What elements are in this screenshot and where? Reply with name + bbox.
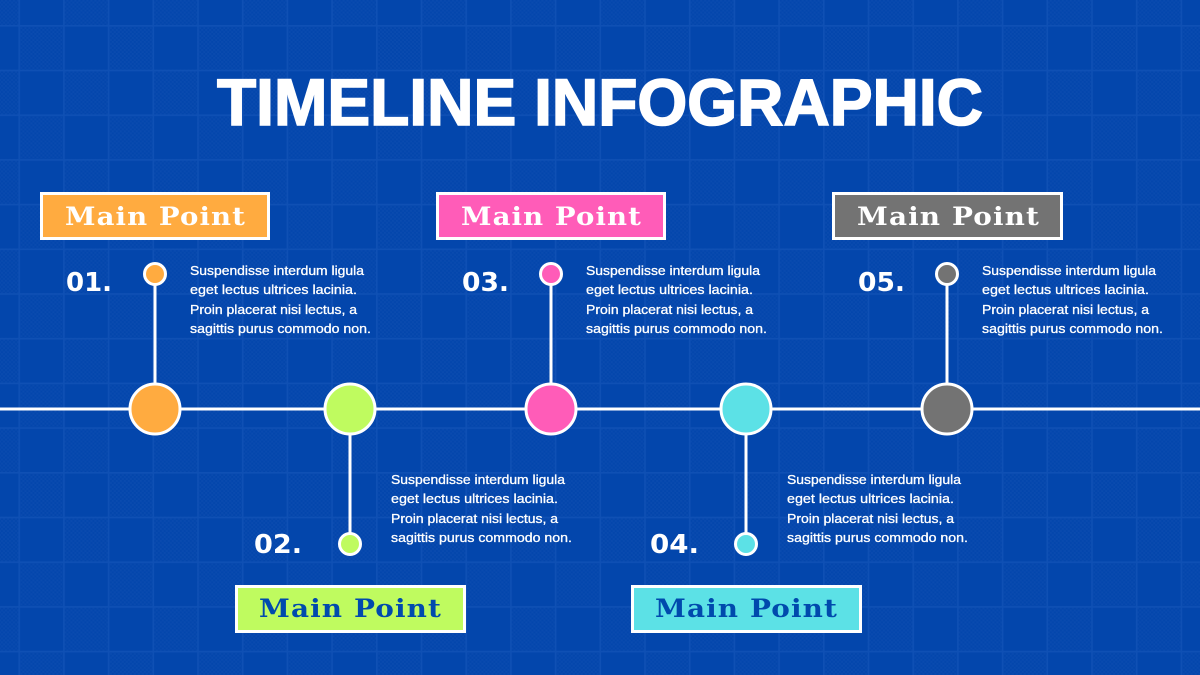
description 03: Proin placerat nisi lectus, a [586, 302, 754, 317]
milestone 02 [236, 384, 572, 632]
number 01: 01. [66, 268, 112, 298]
milestone 01 [42, 194, 371, 434]
milestone 03 [438, 194, 767, 434]
description 05: eget lectus ultrices lacinia. [982, 282, 1149, 297]
description 01: Suspendisse interdum ligula [190, 263, 365, 278]
description 01: Proin placerat nisi lectus, a [190, 302, 358, 317]
description 02: eget lectus ultrices lacinia. [391, 491, 558, 506]
description 04: Suspendisse interdum ligula [787, 472, 962, 487]
description 05: Suspendisse interdum ligula [982, 263, 1157, 278]
description 05: sagittis purus commodo non. [982, 321, 1163, 336]
main point label 03: Main Point [461, 202, 642, 231]
main point label 02: Main Point [259, 594, 442, 623]
main point label 04: Main Point [655, 594, 838, 623]
description 02: sagittis purus commodo non. [391, 530, 572, 545]
description 05 [982, 263, 1163, 336]
description 03: Suspendisse interdum ligula [586, 263, 761, 278]
connector 02 [325, 384, 375, 554]
number 02: 02. [254, 530, 302, 560]
main point label 05: Main Point [857, 202, 1040, 231]
number 05: 05. [858, 268, 905, 298]
description 04: sagittis purus commodo non. [787, 530, 968, 545]
milestone 05 [834, 194, 1163, 434]
description 04: eget lectus ultrices lacinia. [787, 491, 954, 506]
main point label 05 [834, 194, 1062, 238]
timeline axis [0, 408, 1200, 410]
description 04: Proin placerat nisi lectus, a [787, 511, 955, 526]
connector 04 [721, 384, 771, 554]
number 04: 04. [650, 530, 699, 560]
title: TIMELINE INFOGRAPHIC [217, 65, 983, 139]
milestone 04 [632, 384, 968, 632]
main point label 02 [236, 586, 464, 632]
description 05: Proin placerat nisi lectus, a [982, 302, 1150, 317]
description 03: sagittis purus commodo non. [586, 321, 767, 336]
connector 03 [526, 264, 576, 434]
description 02: Suspendisse interdum ligula [391, 472, 566, 487]
description 03 [586, 263, 767, 336]
main point label 01: Main Point [65, 202, 246, 231]
description 01: sagittis purus commodo non. [190, 321, 371, 336]
description 02 [391, 472, 572, 545]
description 01 [190, 263, 371, 336]
main point label 04 [632, 586, 860, 632]
connector 05 [922, 264, 972, 434]
description 01: eget lectus ultrices lacinia. [190, 282, 357, 297]
connector 01 [130, 264, 180, 434]
description 02: Proin placerat nisi lectus, a [391, 511, 559, 526]
main point label 01 [42, 194, 268, 238]
main point label 03 [438, 194, 664, 238]
number 03: 03. [462, 268, 509, 298]
description 04 [787, 472, 968, 545]
description 03: eget lectus ultrices lacinia. [586, 282, 753, 297]
